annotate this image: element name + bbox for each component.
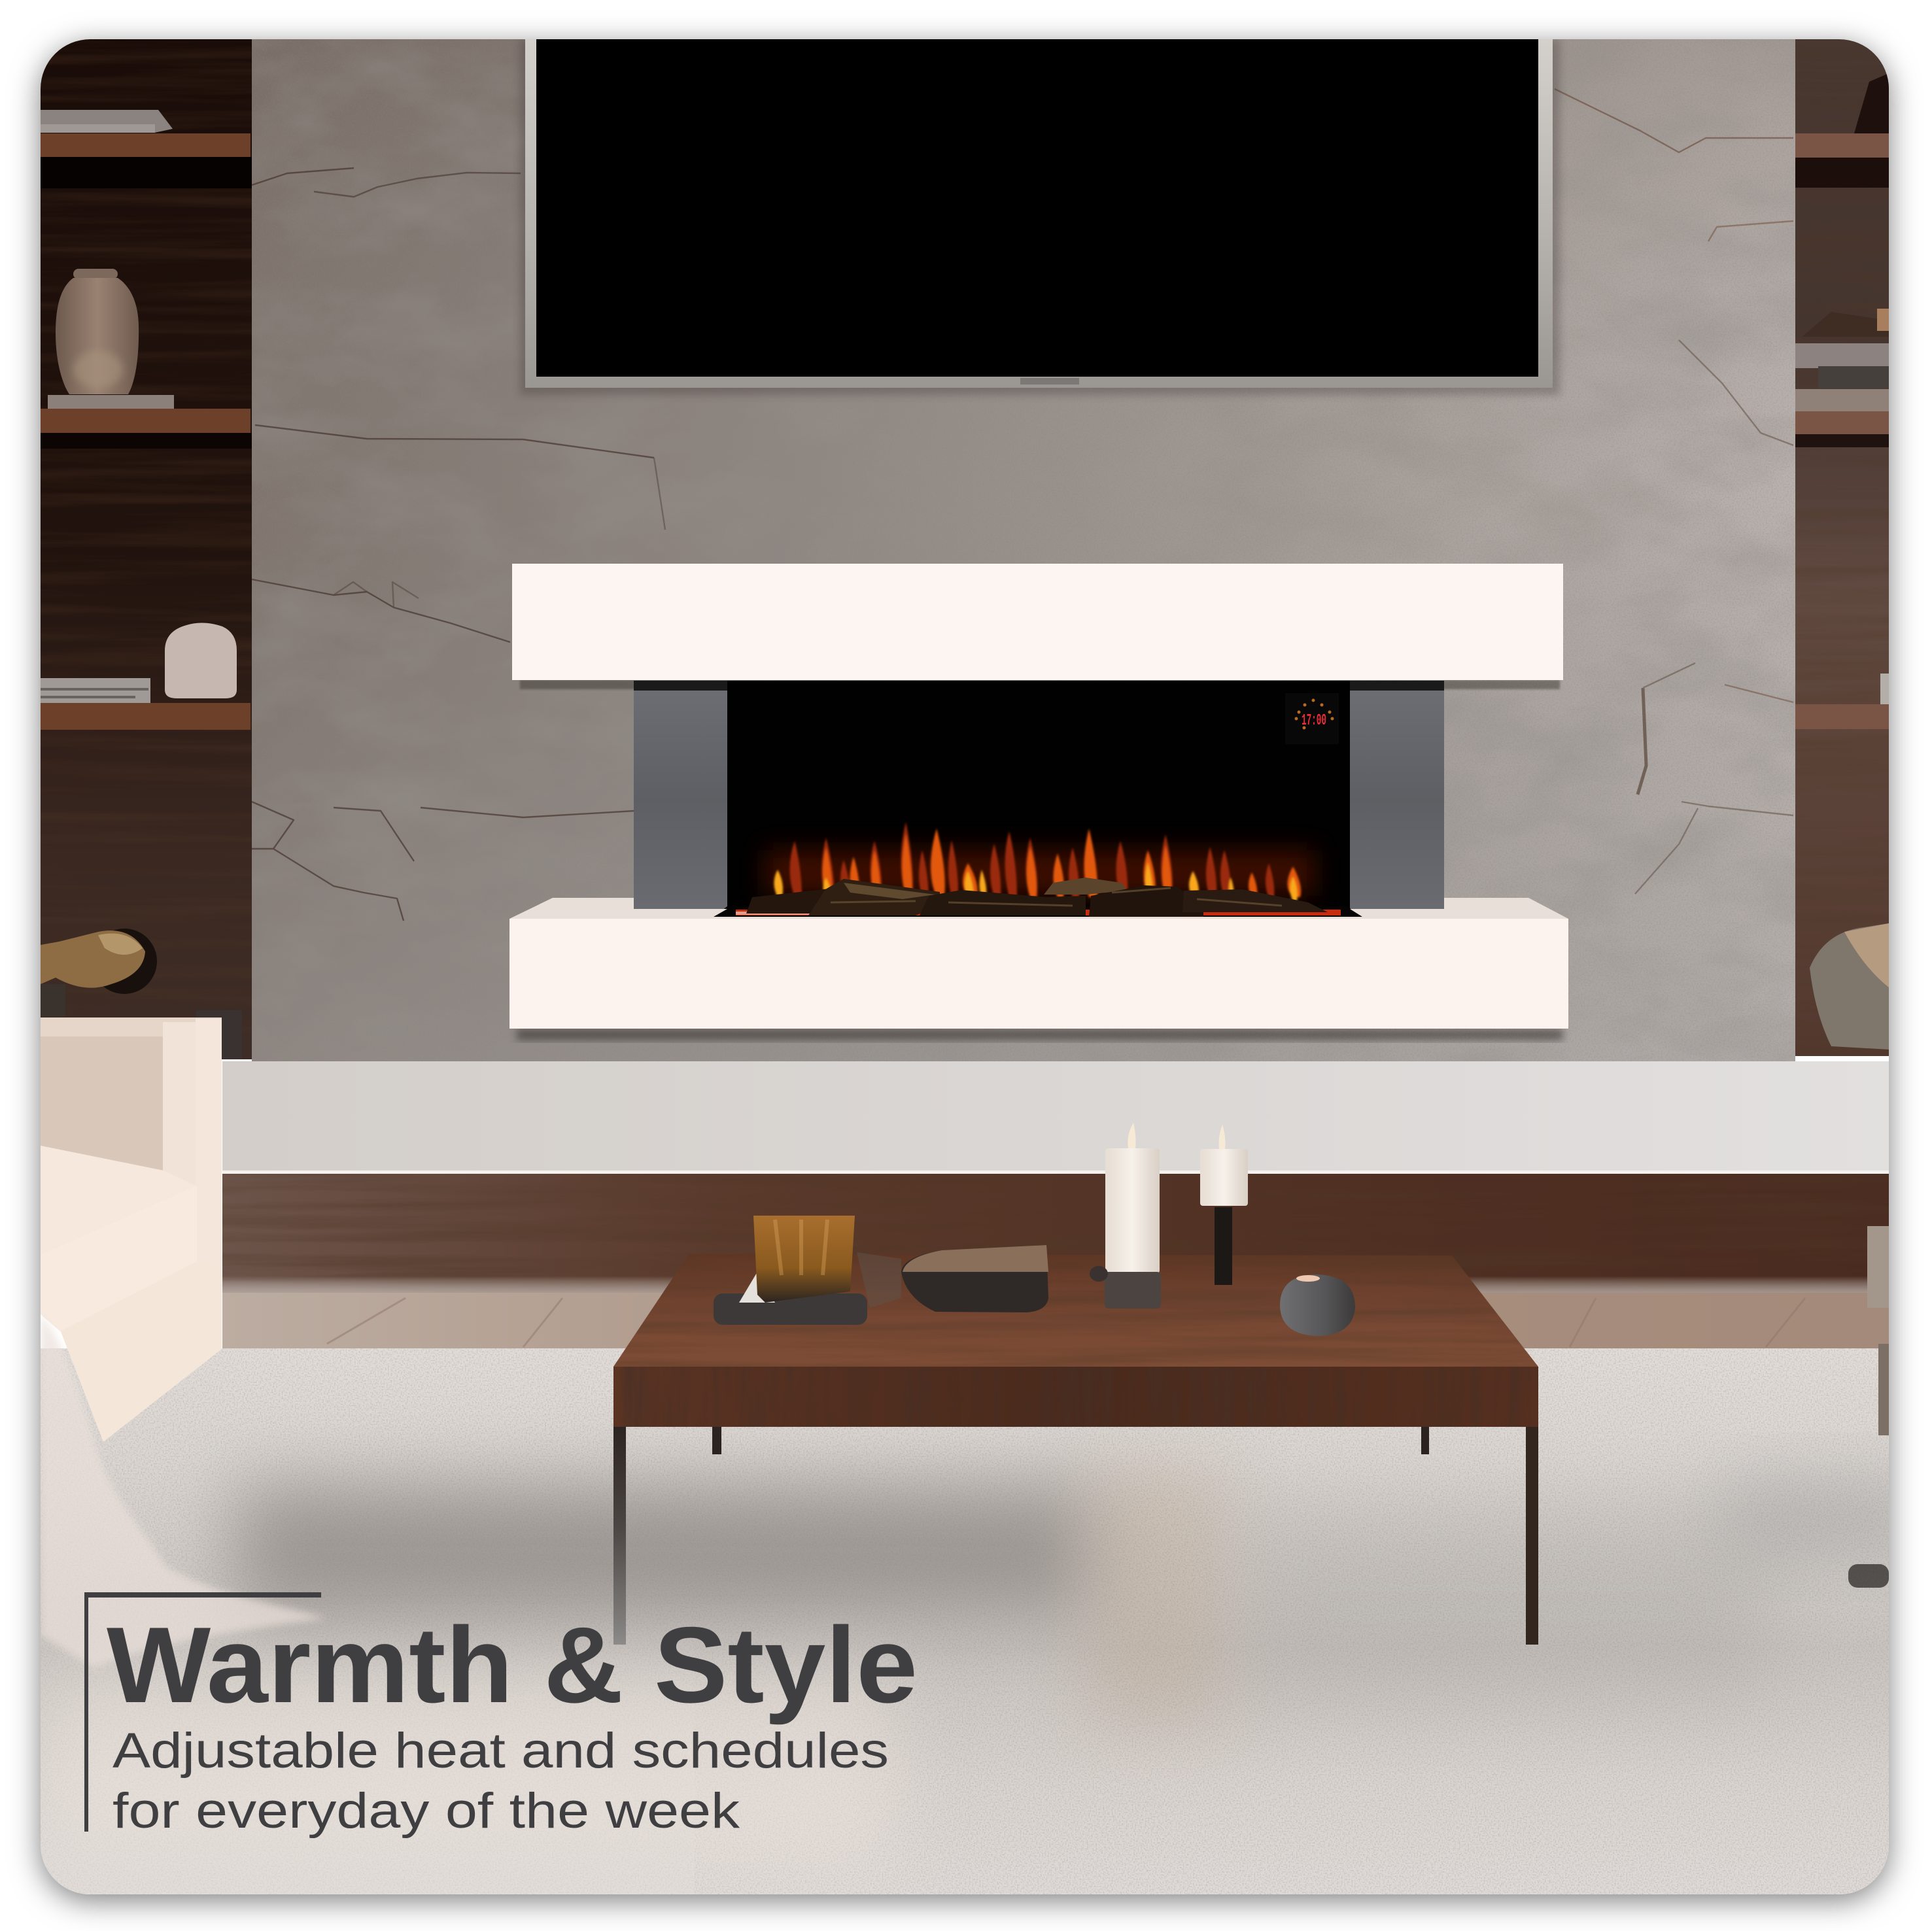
grey side panels: [634, 681, 1444, 909]
stone wall: [252, 39, 1795, 1063]
metal bowl: [1810, 923, 1889, 1050]
text block: warmth and style: [84, 1592, 918, 1839]
small candle on stand: [1200, 1125, 1248, 1285]
flames: [765, 822, 1315, 901]
tray and glass: [714, 1216, 867, 1325]
top mantel: [512, 564, 1563, 680]
left shelving unit: [41, 39, 252, 1059]
coffee table: [613, 1123, 1538, 1645]
clock display: [1285, 693, 1339, 744]
haze over lower area: [41, 1622, 695, 1894]
television: [520, 39, 1560, 395]
lower mantel: [509, 898, 1568, 1029]
sofa: [41, 1017, 327, 1667]
ember tray: [714, 906, 1362, 917]
back flames: [790, 822, 1274, 897]
large candle: [1090, 1123, 1161, 1308]
ledge: [222, 1061, 1889, 1174]
mid flames: [823, 829, 1301, 897]
vase: [56, 269, 139, 394]
headline: Warmth & Style: [107, 1605, 918, 1725]
table top: [613, 1254, 1538, 1367]
shelf boards: [1795, 133, 1889, 729]
stacked books and driftwood: [1795, 309, 1889, 411]
yellow flame cores: [774, 862, 1298, 901]
subtitle: Adjustable heat and schedules: [112, 1723, 889, 1779]
subtitle: for everyday of the week: [112, 1783, 740, 1839]
right edge furniture: [1848, 1226, 1889, 1588]
books top shelf: [41, 110, 173, 133]
right shelving unit: [1795, 39, 1889, 1056]
pebble candle: [1280, 1274, 1355, 1336]
rug: [41, 1348, 1923, 1894]
book under vase: [48, 395, 174, 409]
fireplace: [509, 564, 1568, 1040]
table legs: [613, 1426, 1538, 1645]
stone object: [857, 1245, 1048, 1312]
small book stack: [1880, 674, 1889, 704]
mantel shadow: [520, 680, 1560, 689]
pot: [165, 623, 237, 698]
table apron: [613, 1367, 1538, 1427]
blanket: [41, 1314, 327, 1667]
books second shelf: [41, 678, 150, 703]
logs: [746, 878, 1328, 917]
wood plinth: [222, 1174, 1889, 1293]
firebox: [727, 681, 1350, 910]
rug shadow: [235, 1484, 1099, 1615]
floor boards: [222, 1293, 1889, 1348]
sculpture ornament: [41, 929, 242, 1059]
shelf boards: [41, 133, 250, 730]
clock display: 17:00: [1302, 712, 1326, 730]
subtitle: [112, 1723, 889, 1839]
text bracket: [84, 1592, 321, 1832]
